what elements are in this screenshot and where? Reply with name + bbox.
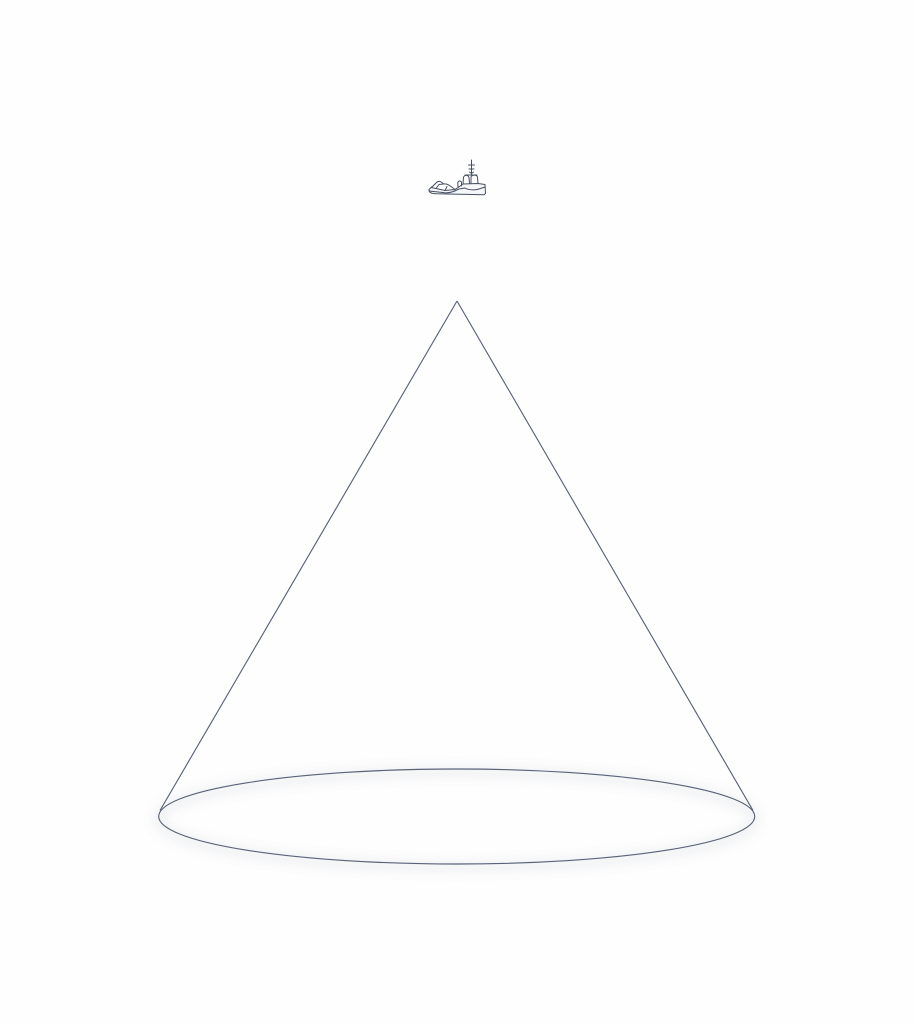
cone left edge	[160, 301, 457, 810]
cone base ellipse	[159, 769, 755, 864]
icon: ship	[429, 160, 486, 195]
cone right edge	[457, 301, 753, 810]
cone	[159, 301, 755, 864]
ellipse soft shadow	[159, 772, 755, 866]
